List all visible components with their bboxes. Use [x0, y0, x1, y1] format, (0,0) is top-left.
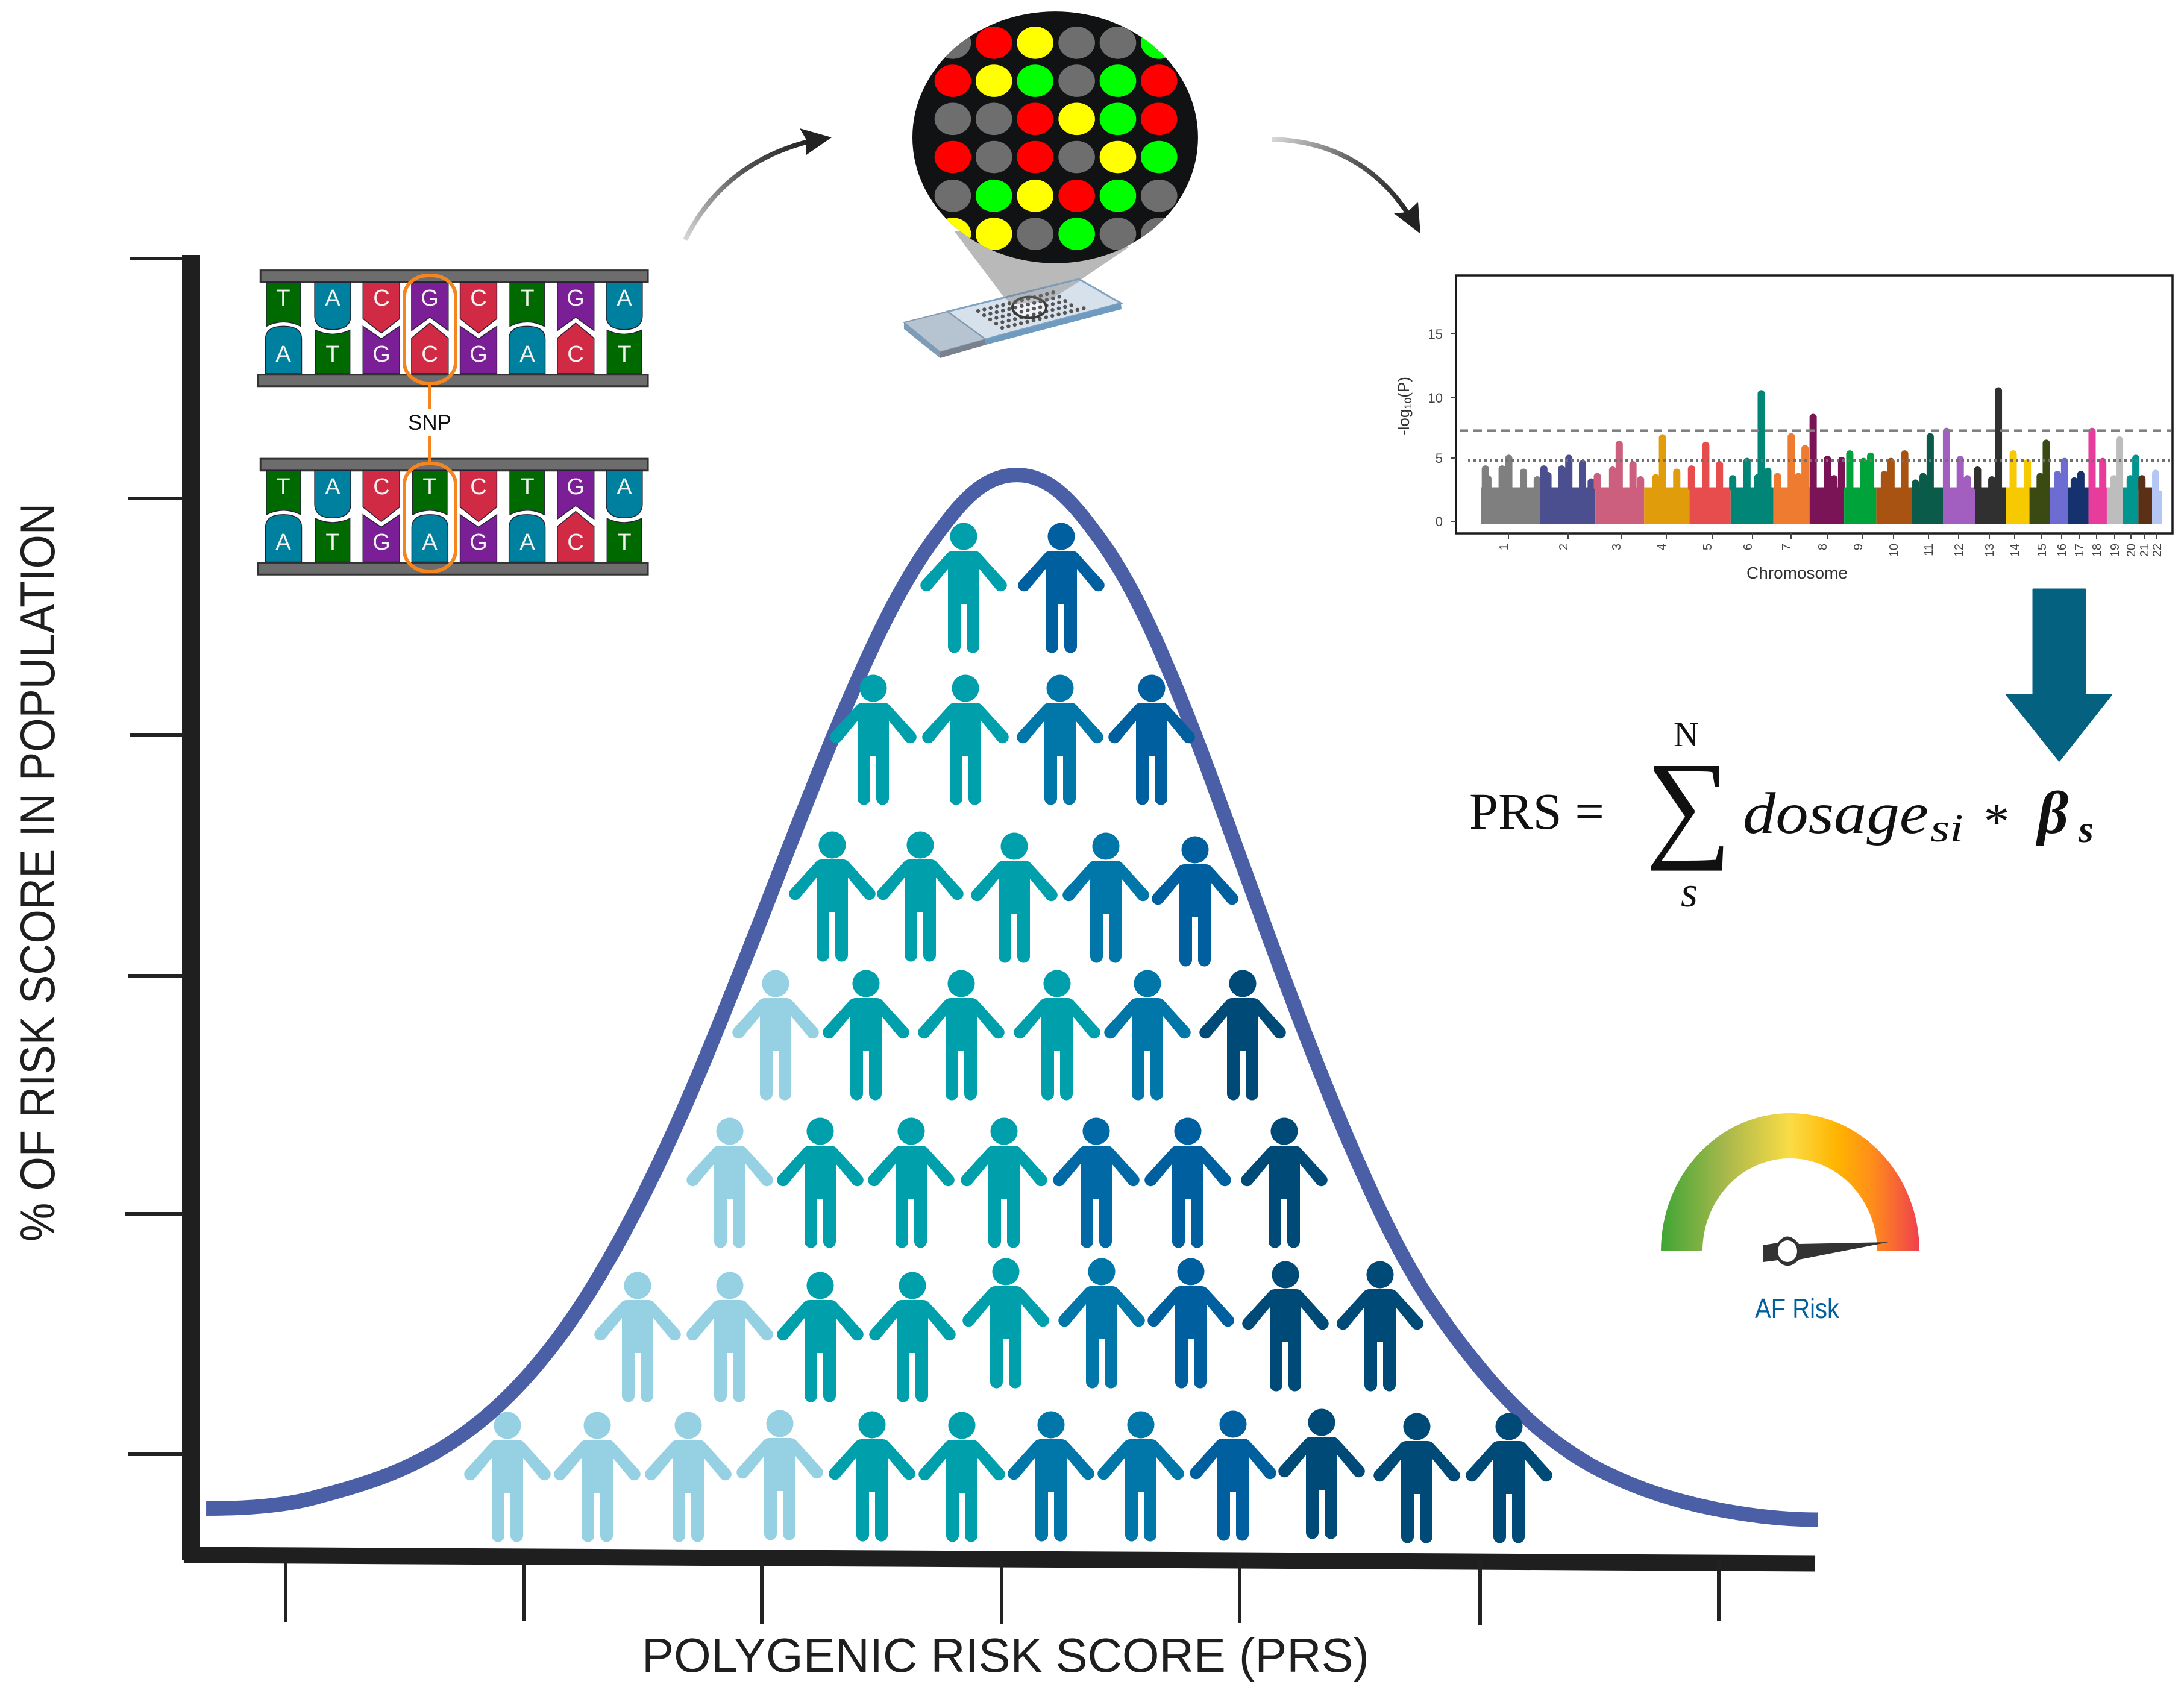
chromosome tick labels: 22	[2151, 544, 2164, 557]
y axis ticks and numbers: 0	[1436, 514, 1443, 529]
DNA strand pair with T-A: A	[519, 530, 535, 555]
chromosome tick labels: 7	[1780, 544, 1793, 550]
DNA strand pair with T-A: A	[422, 530, 438, 555]
DNA strand pair with G-C: T	[617, 342, 632, 367]
glass slide	[904, 279, 1122, 358]
DNA SNP diagram	[258, 271, 648, 574]
DNA strand pair with T-A: T	[325, 530, 340, 555]
y axis ticks and numbers	[1428, 327, 1456, 529]
chromosome tick labels: 3	[1610, 544, 1624, 550]
gauge label: AF Risk	[1755, 1293, 1840, 1324]
DNA strand pair with G-C: G	[566, 286, 585, 311]
row 7 people	[464, 1409, 1552, 1543]
DNA strand pair with G-C: C	[470, 286, 487, 311]
Manhattan plot	[1395, 275, 2173, 582]
row 5 people	[686, 1117, 1328, 1248]
chromosome tick labels: 14	[2009, 544, 2022, 557]
chart axes	[125, 255, 1815, 1625]
arrow: SNP to microarray	[685, 128, 832, 240]
plot frame	[1456, 275, 2173, 533]
DNA strand pair with T-A: G	[372, 530, 391, 555]
dosage term: *	[1984, 793, 2009, 850]
magnification cone	[954, 231, 1129, 297]
DNA strand pair with G-C: A	[519, 342, 535, 367]
chromosome tick labels: 6	[1742, 544, 1755, 550]
y axis ticks and numbers: 10	[1428, 391, 1443, 406]
y axis ticks and numbers: 5	[1436, 451, 1443, 466]
DNA strand pair with T-A: T	[617, 530, 632, 555]
DNA strand pair with G-C: G	[372, 342, 391, 367]
DNA strand pair with G-C: T	[325, 342, 340, 367]
chromosome tick labels: 19	[2109, 544, 2122, 557]
summation symbol: N	[1674, 715, 1699, 754]
chromosome bars and points	[1481, 391, 2162, 524]
x axis title: Chromosome	[1746, 564, 1848, 582]
PRS formula	[1469, 715, 2094, 916]
DNA strand pair with T-A: C	[567, 530, 584, 555]
chromosome tick labels: 11	[1922, 544, 1936, 556]
magnified array	[912, 11, 1198, 263]
y axis title: (P)	[1395, 377, 1413, 398]
DNA strand pair with G-C: A	[275, 342, 291, 367]
row 2 people	[830, 675, 1195, 805]
DNA strand pair with T-A: C	[470, 474, 487, 500]
summation symbol: s	[1681, 868, 1698, 916]
DNA strand pair with T-A: A	[275, 530, 291, 555]
chromosome tick labels: 15	[2036, 544, 2049, 557]
DNA strand pair with G-C: G	[469, 342, 488, 367]
DNA strand pair with T-A: G	[566, 474, 585, 500]
chromosome tick labels: 13	[1983, 544, 1997, 557]
microarray chip illustration	[904, 11, 1198, 358]
DNA strand pair with G-C: T	[276, 286, 290, 311]
DNA strand pair with G-C: A	[617, 286, 632, 311]
chromosome tick labels: 12	[1953, 544, 1966, 557]
y axis title: 10	[1402, 398, 1414, 409]
PRS formula: PRS =	[1469, 782, 1604, 840]
DNA strand pair with T-A: A	[617, 474, 632, 500]
chromosome tick labels: 1	[1498, 544, 1511, 550]
chromosome tick labels: 18	[2091, 544, 2104, 557]
chromosome tick labels: 16	[2056, 544, 2069, 557]
SNP highlight markers	[404, 275, 456, 571]
DNA strand pair with G-C: C	[373, 286, 390, 311]
chromosome tick labels	[1498, 533, 2164, 557]
y axis title: -log	[1395, 409, 1413, 435]
summation symbol	[1646, 715, 1731, 916]
DNA strand pair with G-C: A	[325, 286, 340, 311]
DNA strand pair with G-C: T	[520, 286, 535, 311]
row 3 people	[789, 832, 1238, 967]
arrow: microarray to Manhattan plot	[1272, 139, 1420, 234]
DNA strand pair with G-C: C	[421, 342, 438, 367]
dosage term: dosage	[1743, 781, 1928, 846]
row 4 people	[732, 970, 1286, 1101]
beta term	[2035, 779, 2094, 850]
row 1 people	[920, 523, 1105, 653]
DNA strand pair with T-A: T	[276, 474, 290, 500]
summation symbol: ∑	[1646, 738, 1731, 871]
y axis ticks and numbers: 15	[1428, 327, 1443, 342]
DNA strand pair with G-C	[258, 271, 648, 386]
dosage term	[1743, 781, 2009, 850]
DNA strand pair with T-A: A	[325, 474, 340, 500]
x-axis label: POLYGENIC RISK SCORE (PRS)	[642, 1628, 1369, 1682]
DNA strand pair with T-A: T	[520, 474, 535, 500]
DNA strand pair with G-C: G	[421, 286, 439, 311]
DNA strand pair with T-A: T	[422, 474, 437, 500]
AF risk gauge	[1661, 1113, 1919, 1324]
chromosome tick labels: 17	[2073, 544, 2086, 557]
bell curve	[206, 475, 1818, 1520]
row 6 people	[594, 1258, 1423, 1402]
chromosome tick labels: 4	[1655, 544, 1669, 550]
gauge needle	[1763, 1236, 1889, 1266]
arrow: Manhattan plot to formula	[2007, 589, 2111, 761]
y-axis label: % OF RISK SCORE IN POPULATION	[11, 503, 65, 1242]
gauge arc	[1661, 1113, 1919, 1251]
chromosome tick labels: 5	[1701, 544, 1715, 550]
chromosome tick labels: 2	[1557, 544, 1571, 550]
chromosome tick labels: 8	[1816, 544, 1830, 550]
DNA strand pair with T-A: C	[373, 474, 390, 500]
DNA strand pair with G-C: C	[567, 342, 584, 367]
chromosome tick labels: 20	[2125, 544, 2138, 557]
DNA strand pair with T-A: G	[469, 530, 488, 555]
dosage term: si	[1930, 806, 1963, 850]
chromosome tick labels: 21	[2138, 544, 2151, 557]
chromosome tick labels: 9	[1852, 544, 1865, 550]
chromosome tick labels: 10	[1887, 544, 1901, 557]
beta term: β	[2035, 779, 2068, 846]
SNP label: SNP	[408, 411, 451, 435]
population figures under the curve	[464, 523, 1552, 1543]
beta term: s	[2078, 808, 2094, 850]
DNA strand pair with T-A	[258, 459, 648, 574]
